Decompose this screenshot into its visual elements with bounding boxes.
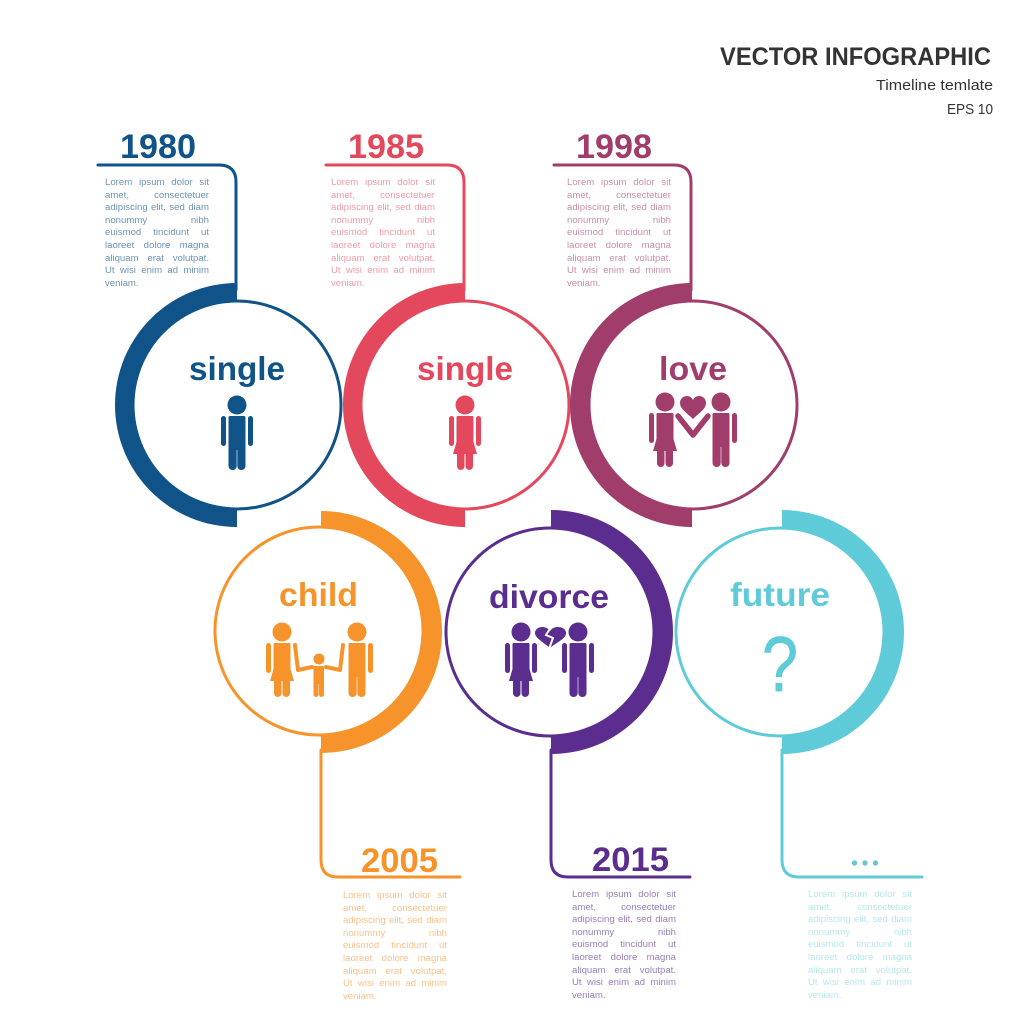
circle ring	[570, 283, 797, 527]
connector line	[554, 165, 691, 290]
panel: future	[676, 510, 922, 1005]
heading: VECTOR INFOGRAPHIC	[720, 43, 991, 71]
connector line	[326, 165, 464, 290]
icon: question mark: ?	[762, 620, 798, 708]
text block: veniam.	[567, 278, 601, 289]
label: divorce	[489, 578, 609, 615]
text block: laoreet dolore magna	[331, 240, 435, 251]
icon: woman	[449, 396, 481, 470]
connector line	[782, 750, 922, 877]
text block: veniam.	[808, 990, 842, 1001]
year: 1980	[120, 128, 196, 166]
year: 1985	[348, 128, 424, 166]
panel: 1998 love	[554, 128, 797, 527]
text block: Lorem ipsum dolor sit	[567, 177, 671, 188]
text block: Lorem ipsum dolor sit	[331, 177, 435, 188]
circle ring	[215, 511, 442, 753]
label: child	[279, 576, 358, 613]
year: 2015	[592, 841, 669, 879]
text block: veniam.	[105, 278, 139, 289]
panel: 1985 single	[326, 128, 569, 527]
text block: laoreet dolore magna	[105, 240, 209, 251]
text block: Ut wisi enim ad minim	[105, 265, 209, 276]
circle ring	[676, 510, 904, 754]
text block: amet, consectetuer	[331, 190, 435, 201]
connector line	[98, 165, 236, 290]
text block: amet, consectetuer	[572, 902, 676, 913]
text block: laoreet dolore magna	[572, 952, 676, 963]
text block: Ut wisi enim ad minim	[567, 265, 671, 276]
label: future	[730, 576, 830, 613]
text block: veniam.	[343, 991, 377, 1002]
text block: aliquam erat volutpat.	[808, 965, 912, 976]
text block: laoreet dolore magna	[567, 240, 671, 251]
ellipsis	[852, 860, 878, 866]
text block: nonummy nibh	[572, 927, 676, 938]
label: single	[417, 350, 513, 387]
text block: Ut wisi enim ad minim	[572, 977, 676, 988]
text block: euismod tincidunt ut	[331, 227, 435, 238]
panel: 1980 single	[98, 128, 341, 527]
title block	[720, 43, 993, 118]
text block: aliquam erat volutpat.	[105, 253, 209, 264]
text block	[567, 177, 673, 293]
text block: Ut wisi enim ad minim	[808, 977, 912, 988]
text block: Lorem ipsum dolor sit	[808, 889, 912, 900]
text block: adipiscing elit, sed diam	[567, 202, 671, 213]
subtitle: Timeline temlate	[876, 77, 993, 94]
connector line	[321, 750, 460, 877]
text block: euismod tincidunt ut	[808, 939, 912, 950]
text block: adipiscing elit, sed diam	[105, 202, 209, 213]
text block: Ut wisi enim ad minim	[343, 978, 447, 989]
text block: euismod tincidunt ut	[343, 940, 447, 951]
text block	[808, 889, 914, 1005]
text block: adipiscing elit, sed diam	[572, 914, 676, 925]
text block: euismod tincidunt ut	[105, 227, 209, 238]
text block	[343, 890, 449, 1006]
text block: nonummy nibh	[343, 928, 447, 939]
connector line	[551, 750, 690, 877]
icon: couple in love	[649, 392, 737, 467]
text block: nonummy nibh	[808, 927, 912, 938]
text block	[105, 177, 211, 293]
text block: laoreet dolore magna	[808, 952, 912, 963]
text block	[331, 177, 437, 293]
format note: EPS 10	[947, 101, 993, 118]
year: 1998	[576, 128, 652, 166]
text block: aliquam erat volutpat.	[572, 965, 676, 976]
text block: Lorem ipsum dolor sit	[572, 889, 676, 900]
icon: divorced couple	[505, 622, 594, 697]
text block: adipiscing elit, sed diam	[331, 202, 435, 213]
panel: 2005 child	[215, 511, 460, 1006]
text block: nonummy nibh	[105, 215, 209, 226]
text block: Lorem ipsum dolor sit	[343, 890, 447, 901]
text block	[572, 889, 678, 1005]
text block: aliquam erat volutpat.	[331, 253, 435, 264]
text block: Ut wisi enim ad minim	[331, 265, 435, 276]
text block: adipiscing elit, sed diam	[808, 914, 912, 925]
text block: amet, consectetuer	[808, 902, 912, 913]
text block: adipiscing elit, sed diam	[343, 915, 447, 926]
text block: aliquam erat volutpat.	[343, 966, 447, 977]
icon: man	[221, 396, 253, 470]
text block: euismod tincidunt ut	[572, 939, 676, 950]
year: 2005	[361, 842, 438, 880]
text block: amet, consectetuer	[105, 190, 209, 201]
icon: family	[266, 622, 373, 697]
circle ring	[446, 510, 673, 754]
text block: veniam.	[572, 990, 606, 1001]
panel: 2015 divorce	[446, 510, 690, 1005]
circle ring	[343, 283, 569, 527]
label: single	[189, 350, 285, 387]
text block: euismod tincidunt ut	[567, 227, 671, 238]
text block: veniam.	[331, 278, 365, 289]
text block: Lorem ipsum dolor sit	[105, 177, 209, 188]
circle ring	[115, 283, 341, 527]
text block: nonummy nibh	[567, 215, 671, 226]
text block: amet, consectetuer	[343, 903, 447, 914]
text block: amet, consectetuer	[567, 190, 671, 201]
text block: aliquam erat volutpat.	[567, 253, 671, 264]
label: love	[659, 350, 727, 387]
text block: nonummy nibh	[331, 215, 435, 226]
text block: laoreet dolore magna	[343, 953, 447, 964]
